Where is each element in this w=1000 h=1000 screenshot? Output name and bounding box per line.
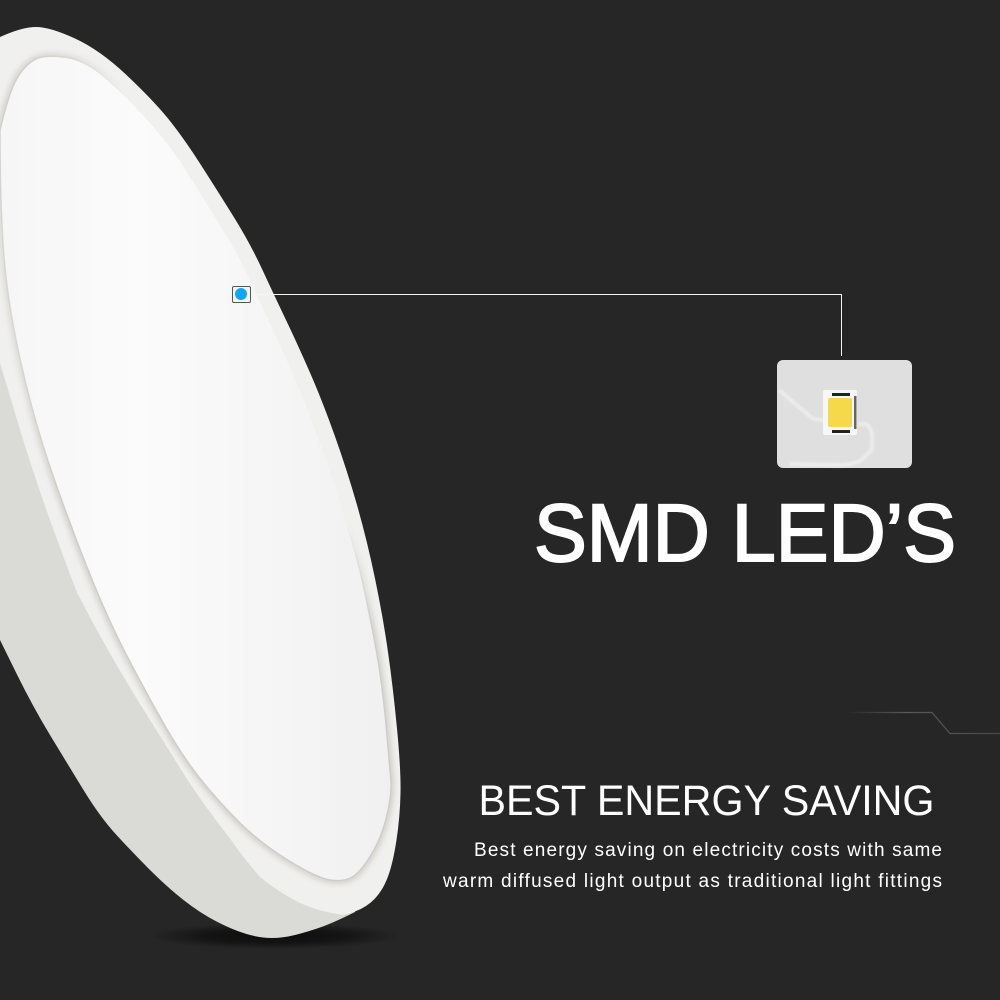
inset: SMD LED chip photo (777, 360, 912, 468)
LED package (823, 390, 857, 435)
callout marker: blue dot in square (232, 286, 250, 302)
circuit traces (779, 390, 872, 465)
heading: SMD LED'S: SMD LED’S (534, 488, 956, 579)
body text (442, 840, 942, 892)
recessed groove shadow (0, 56, 391, 881)
outer ring (0, 27, 401, 915)
subheading: best energy saving: BEST ENERGY SAVING (478, 777, 934, 825)
lamp side body (0, 363, 355, 938)
callout connector line (255, 294, 842, 356)
light diffuser disc (0, 56, 391, 881)
body text: warm diffused light output as traditional light fittings (442, 871, 942, 892)
shadow under the lamp (150, 923, 400, 949)
product: round LED ceiling light (0, 27, 401, 949)
decorative line (845, 712, 1000, 734)
body text: Best energy saving on electricity costs with same (474, 840, 942, 861)
